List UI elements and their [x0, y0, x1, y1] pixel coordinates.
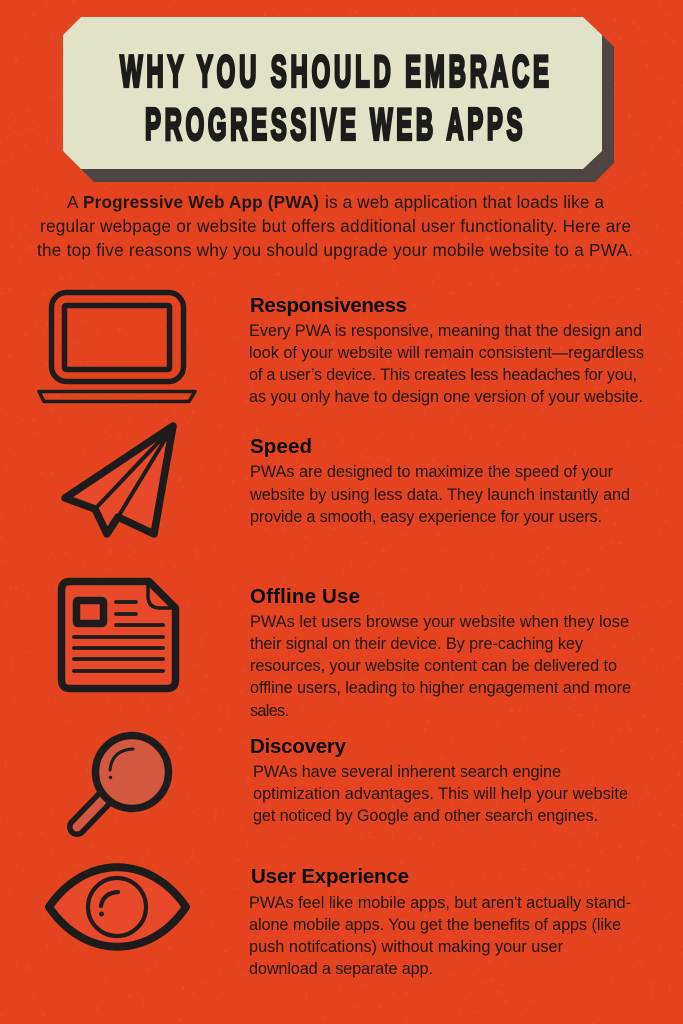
intro paragraph: regular webpage or website but offers additional user functionality. Here are: [40, 216, 631, 236]
title: [120, 47, 549, 149]
text: Offline Use: their signal on their device. By pre-caching key: [250, 635, 584, 653]
icon: magnifying glass: [77, 736, 168, 827]
banner plate: [63, 17, 602, 169]
text: Responsiveness: look of your website will remain consistent—regardless: [249, 344, 644, 362]
text: Offline Use: sales.: [250, 702, 289, 720]
text: Responsiveness: Every PWA is responsive, meaning that the design and: [249, 322, 642, 340]
text: User Experience: PWAs feel like mobile apps, but aren't actually stand-: [249, 894, 631, 912]
icon: paper plane: [65, 426, 173, 534]
icon: laptop: [39, 292, 195, 402]
intro paragraph: A: [67, 192, 79, 212]
intro paragraph: [37, 192, 633, 260]
text: Offline Use: resources, your website content can be delivered to: [250, 657, 617, 675]
text: Offline Use: [250, 613, 631, 720]
text: User Experience: alone mobile apps. You get the benefits of apps (like: [249, 916, 621, 934]
text: Speed: provide a smooth, easy experience for your users.: [250, 508, 602, 526]
title: WHY YOU SHOULD EMBRACE: [120, 47, 549, 96]
text: User Experience: download a separate app.: [249, 960, 433, 978]
text: Responsiveness: as you only have to design one version of your website.: [249, 388, 643, 406]
text: Discovery: PWAs have several inherent search engine: [253, 763, 561, 781]
text: User Experience: [249, 894, 631, 978]
banner shadow: [81, 35, 614, 182]
heading: Responsiveness: Responsiveness: [250, 294, 407, 317]
heading: Offline Use: Offline Use: [250, 585, 360, 608]
icon: eye: [49, 867, 186, 947]
text: Responsiveness: of a user’s device. This creates less headaches for you,: [249, 366, 637, 384]
text: Discovery: get noticed by Google and other search engines.: [253, 807, 598, 825]
text: Speed: [249, 463, 630, 526]
heading: User Experience: User Experience: [251, 865, 409, 888]
text: Discovery: [253, 763, 628, 825]
title banner: [63, 17, 614, 182]
text: User Experience: push notifcations) without making your user: [249, 938, 564, 956]
heading: Discovery: Discovery: [250, 735, 347, 758]
intro paragraph: the top five reasons why you should upgrade your mobile website to a PWA.: [37, 240, 633, 260]
text: Offline Use: offline users, leading to higher engagement and more: [250, 679, 631, 697]
text: Responsiveness: [249, 322, 644, 406]
icon: document: [62, 582, 176, 688]
intro paragraph: Progressive Web App (PWA): [83, 192, 319, 212]
text: Discovery: optimization advantages. This will help your website: [253, 785, 628, 803]
text: Speed: PWAs are designed to maximize the speed of your: [250, 463, 614, 481]
heading: Speed: Speed: [250, 435, 312, 458]
intro paragraph: is a web application that loads like a: [325, 192, 604, 212]
title: PROGRESSIVE WEB APPS: [145, 100, 523, 149]
text: Offline Use: PWAs let users browse your website when they lose: [250, 613, 629, 631]
text: Speed: website by using less data. They launch instantly and: [249, 486, 630, 504]
